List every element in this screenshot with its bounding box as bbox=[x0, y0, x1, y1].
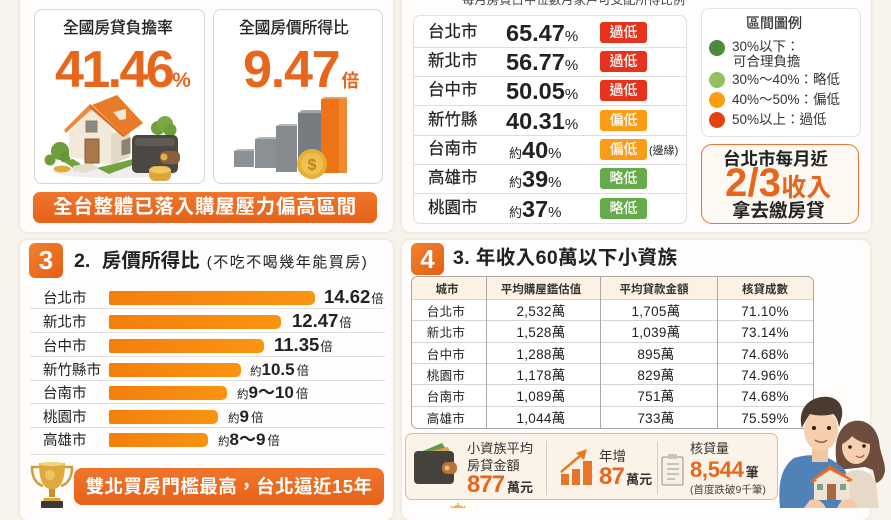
table: low income data: 核貸成數 bbox=[742, 282, 788, 296]
stat: average mortgage: 小資族平均 bbox=[467, 441, 533, 456]
row: Tainan: 約40% bbox=[509, 137, 562, 163]
bar row: Taipei: 14.62倍 bbox=[324, 286, 384, 307]
table: low income data: 1,178萬 bbox=[516, 368, 566, 383]
bar row: Taipei: 台北市 bbox=[43, 291, 86, 307]
row: Taipei bbox=[428, 20, 647, 46]
row: New Taipei: 新北市 bbox=[428, 52, 478, 70]
bar chart: price income by city bbox=[30, 288, 390, 458]
banner: Taipei threshold bbox=[74, 468, 384, 505]
row: Taichung: 過低 bbox=[610, 82, 638, 98]
stat: approved loans bbox=[690, 441, 766, 496]
callout: Taipei two thirds bbox=[701, 144, 859, 224]
row: New Taipei: 56.77% bbox=[506, 49, 578, 75]
row: Kaohsiung bbox=[428, 166, 647, 192]
stat: annual increase: 年增 bbox=[599, 449, 626, 464]
stat: approved loans: 核貸量 bbox=[690, 441, 729, 456]
bar row: Kaohsiung: 高雄市 bbox=[43, 433, 86, 449]
card: national price income ratio bbox=[213, 9, 383, 184]
bar row: Taoyuan: 桃園市 bbox=[43, 410, 86, 426]
legend item: under 30% bbox=[709, 39, 800, 69]
table: low income data: 平均購屋鑑估值 bbox=[501, 282, 582, 296]
icon: clipboard bbox=[662, 454, 684, 486]
icon: rising bars and coin bbox=[234, 97, 347, 179]
table: low income data: 桃園市 bbox=[427, 368, 465, 383]
heading: mortgage burden: 全國房貸負擔率 bbox=[63, 20, 173, 37]
bar row: Kaohsiung: 約8～9倍 bbox=[218, 430, 280, 449]
row: Kaohsiung: 略低 bbox=[610, 170, 638, 186]
row: Kaohsiung: 約39% bbox=[509, 166, 562, 192]
stat: annual increase bbox=[599, 449, 652, 490]
legend item: over 50: 50%以上：過低 bbox=[732, 112, 827, 127]
legend item: 40 to 50: 40%～50%：偏低 bbox=[732, 92, 840, 107]
table: low income data: 1,044萬 bbox=[516, 411, 566, 426]
callout: Taipei two thirds: 台北市每月近 bbox=[723, 149, 828, 169]
badge: 4 bbox=[411, 243, 444, 275]
row: Taichung: 50.05% bbox=[506, 78, 578, 104]
row: Hsinchu County: 40.31% bbox=[506, 108, 578, 134]
bar row: Hsinchu bbox=[43, 360, 309, 379]
icon: trophy bbox=[30, 462, 74, 508]
callout: Taipei two thirds: 拿去繳房貸 bbox=[732, 200, 825, 221]
row: Taoyuan: 桃園市 bbox=[428, 199, 478, 217]
icon: house and wallet bbox=[44, 95, 180, 181]
table: low income data: 75.59% bbox=[741, 411, 789, 426]
bar row: New Taipei: 新北市 bbox=[43, 315, 86, 331]
table: low income data: 2,532萬 bbox=[516, 304, 566, 319]
panel: low income buyers bbox=[402, 240, 870, 520]
stats box: small earner summary bbox=[405, 433, 778, 500]
stat: approved loans: 8,544筆 bbox=[690, 457, 759, 482]
table: low income data bbox=[411, 276, 814, 429]
legend item: under 30%: 30%以下： bbox=[732, 39, 800, 54]
table: low income data: 751萬 bbox=[637, 389, 675, 404]
bar row: New Taipei bbox=[43, 310, 352, 331]
table: low income data: 1,528萬 bbox=[516, 325, 566, 340]
bar row: Taichung bbox=[43, 334, 333, 355]
bar row: Hsinchu: 約10.5倍 bbox=[250, 360, 309, 379]
stat: average mortgage bbox=[467, 441, 533, 498]
legend heading: 區間圖例 bbox=[746, 15, 802, 31]
icon: family holding house bbox=[779, 396, 885, 508]
bar row: Tainan: 台南市 bbox=[43, 386, 86, 402]
row: Tainan: 台南市 bbox=[428, 140, 478, 158]
table: low income data: 74.68% bbox=[741, 347, 789, 362]
table: low income data: 74.68% bbox=[741, 389, 789, 404]
card: national mortgage burden bbox=[34, 9, 205, 184]
bar row: Taichung: 台中市 bbox=[43, 339, 86, 355]
banner: Taipei threshold: 雙北買房門檻最高，台北逼近15年 bbox=[86, 476, 372, 497]
stat: average mortgage: 房貸金額 bbox=[467, 458, 520, 473]
table: low income data: 74.96% bbox=[741, 368, 789, 383]
row: Taichung bbox=[428, 78, 647, 104]
table: burden rate by city bbox=[413, 15, 687, 224]
heading: under 600k income: 3. 年收入60萬以下小資族 bbox=[453, 247, 677, 269]
legend item: under 30%: 可合理負擔 bbox=[733, 54, 800, 69]
table: low income data: 城市 bbox=[436, 282, 459, 296]
panel: county burden rates bbox=[402, 0, 871, 232]
row: Taipei: 過低 bbox=[610, 24, 638, 40]
legend: range legend bbox=[701, 8, 861, 137]
row: Tainan bbox=[428, 137, 678, 163]
row: Hsinchu County: 偏低 bbox=[610, 112, 638, 128]
bar row: Tainan bbox=[43, 383, 308, 402]
icon: rising bars and coin: $ bbox=[308, 157, 317, 174]
icon: sun, cut off at bottom bbox=[450, 503, 466, 508]
table: low income data: 1,288萬 bbox=[516, 347, 566, 362]
row: Tainan: (邊緣) bbox=[649, 145, 678, 157]
heading: price income ratio: 2. 房價所得比 (不吃不喝幾年能買房) bbox=[74, 250, 368, 272]
table: low income data: 台北市 bbox=[427, 304, 465, 319]
row: Tainan: 偏低 bbox=[610, 141, 638, 157]
row: Taoyuan: 略低 bbox=[610, 200, 638, 216]
badge: 3 bbox=[29, 243, 63, 278]
icon: wallet bbox=[414, 443, 457, 484]
panel: national indicators bbox=[20, 0, 393, 232]
bar row: Taoyuan bbox=[43, 407, 263, 426]
table: low income data: 71.10% bbox=[741, 304, 789, 319]
bar row: New Taipei: 12.47倍 bbox=[292, 310, 352, 331]
stat: approved loans: (首度跌破9千筆) bbox=[690, 484, 766, 496]
bar row: Tainan: 約9～10倍 bbox=[237, 383, 308, 402]
row: Hsinchu County bbox=[428, 108, 647, 134]
number: 9.47 times: 9.47倍 bbox=[243, 41, 359, 99]
table: low income data: 1,039萬 bbox=[631, 325, 681, 340]
panel: price to income ranking bbox=[20, 240, 393, 520]
row: New Taipei: 過低 bbox=[610, 53, 638, 69]
bar row: Taichung: 11.35倍 bbox=[274, 334, 333, 355]
row: Taipei: 台北市 bbox=[428, 23, 478, 41]
row: Taoyuan: 約37% bbox=[509, 196, 562, 222]
badge: 4: 4 bbox=[420, 244, 435, 274]
bar row: Kaohsiung bbox=[43, 430, 280, 449]
row: Taichung: 台中市 bbox=[428, 81, 478, 99]
row: Taipei: 65.47% bbox=[506, 20, 578, 46]
stat: annual increase: 87萬元 bbox=[599, 463, 652, 490]
legend item: 30 to 40: 30%～40%：略低 bbox=[732, 72, 840, 87]
bar row: Taoyuan: 約9倍 bbox=[228, 407, 263, 426]
number: 41.46%: 41.46% bbox=[55, 41, 191, 99]
stat: average mortgage: 877萬元 bbox=[467, 471, 533, 498]
table: low income data: 733萬 bbox=[637, 411, 675, 426]
icon: growth chart bbox=[560, 449, 592, 485]
table: low income data: 1,089萬 bbox=[516, 389, 566, 404]
table: low income data: 1,705萬 bbox=[631, 304, 681, 319]
banner: overall pressure bbox=[33, 192, 377, 223]
row: Hsinchu County: 新竹縣 bbox=[428, 111, 478, 129]
table: low income data: 73.14% bbox=[741, 325, 789, 340]
table: low income data: 895萬 bbox=[637, 347, 675, 362]
row: New Taipei bbox=[428, 49, 647, 75]
heading: price income ratio: 全國房價所得比 bbox=[239, 20, 349, 37]
banner: overall pressure: 全台整體已落入購屋壓力偏高區間 bbox=[53, 196, 357, 218]
callout: Taipei two thirds: 2/3收入 bbox=[725, 161, 831, 205]
row: Kaohsiung: 高雄市 bbox=[428, 169, 478, 187]
badge: 3: 3 bbox=[39, 245, 53, 275]
table: low income data: 高雄市 bbox=[427, 411, 465, 426]
table: low income data: 台南市 bbox=[427, 389, 465, 404]
row: Taoyuan bbox=[428, 196, 647, 222]
bar row: Taipei bbox=[43, 286, 384, 307]
table: low income data: 台中市 bbox=[427, 347, 465, 362]
bar row: Hsinchu: 新竹縣市 bbox=[43, 363, 101, 379]
table: low income data: 平均貸款金額 bbox=[620, 282, 689, 296]
table: low income data: 829萬 bbox=[637, 368, 675, 383]
table: low income data: 新北市 bbox=[427, 325, 465, 340]
